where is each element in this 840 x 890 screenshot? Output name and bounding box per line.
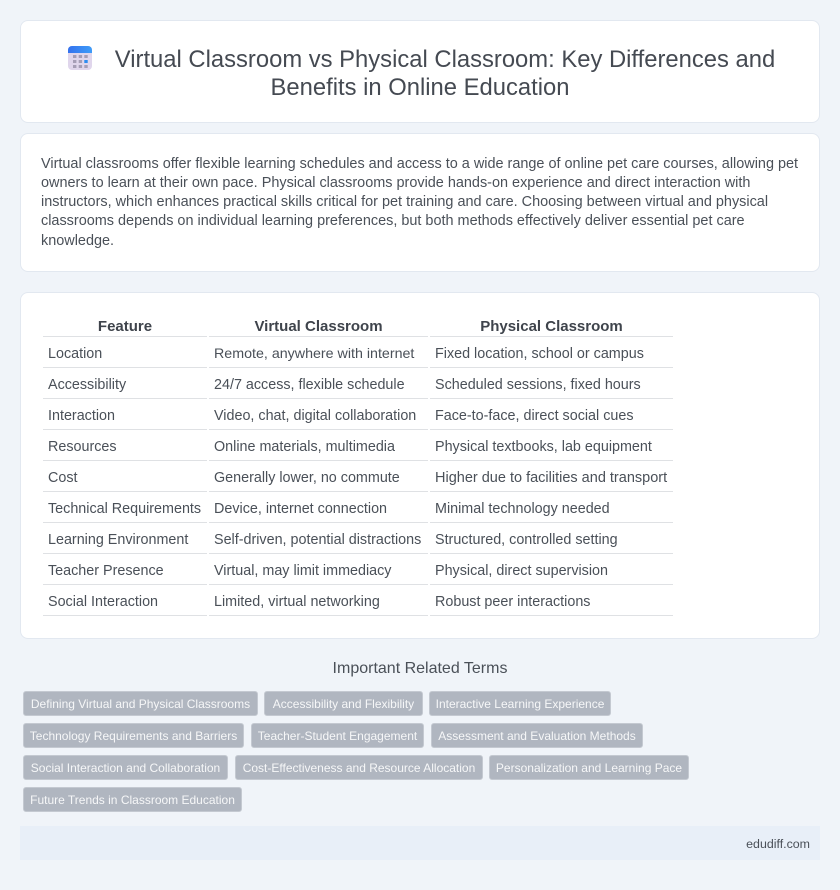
table column: Physical Classroom: Minimal technology needed	[435, 501, 610, 517]
table column: Feature	[48, 346, 201, 610]
text block: introduction: Virtual classrooms offer flexible learning schedules and access to a wide range of online pet care courses, allowing pet	[41, 156, 798, 172]
table column: Virtual Classroom: Remote, anywhere with internet	[214, 346, 414, 362]
table column: Virtual Classroom: Video, chat, digital collaboration	[214, 408, 416, 424]
table column: Virtual Classroom: 24/7 access, flexible schedule	[214, 377, 405, 393]
footer credit: edudiff.com	[746, 837, 810, 851]
footer	[20, 826, 820, 860]
table column: Virtual Classroom	[214, 346, 421, 610]
panel: comparison table	[20, 292, 820, 639]
text block: introduction: knowledge.	[41, 233, 114, 249]
icon: calendar	[68, 46, 92, 70]
table column: Virtual Classroom: Virtual, may limit immediacy	[214, 563, 391, 579]
table column: Feature: Learning Environment	[48, 532, 188, 548]
table column: Physical Classroom: Robust peer interactions	[435, 594, 590, 610]
tag list: related terms: Technology Requirements and Barriers	[30, 729, 237, 743]
table column: Feature: Social Interaction	[48, 594, 158, 610]
table column: Feature: Technical Requirements	[48, 501, 201, 517]
panel: header	[20, 20, 820, 123]
tag list: related terms: Assessment and Evaluation Methods	[438, 729, 636, 743]
table column: Feature: Teacher Presence	[48, 563, 164, 579]
table column: Physical Classroom: Fixed location, school or campus	[435, 346, 644, 362]
tag list: related terms: Future Trends in Classroom Education	[30, 793, 235, 807]
title	[114, 46, 775, 101]
table column: Virtual Classroom: Online materials, multimedia	[214, 439, 395, 455]
title: Benefits in Online Education	[270, 74, 569, 101]
table header: Virtual Classroom: Virtual Classroom	[254, 318, 383, 335]
tag list: related terms: Interactive Learning Experience	[436, 697, 604, 711]
table column: Physical Classroom: Higher due to facilities and transport	[435, 470, 667, 486]
text block: introduction: instructors, which enhances practical skills critical for pet training and care. Choosing between virtual and physical	[41, 194, 768, 210]
table column: Virtual Classroom: Self-driven, potential distractions	[214, 532, 421, 548]
table column: Physical Classroom: Structured, controlled setting	[435, 532, 618, 548]
text block: introduction: owners to learn at their own pace. Physical classrooms provide hands-on experience and direct interaction with	[41, 175, 750, 191]
tag list: related terms: Social Interaction and Collaboration	[31, 761, 220, 775]
table column: Virtual Classroom: Limited, virtual networking	[214, 594, 380, 610]
tag list: related terms: Defining Virtual and Physical Classrooms	[31, 697, 250, 711]
tag list: related terms: Cost-Effectiveness and Resource Allocation	[243, 761, 475, 775]
table header: Physical Classroom: Physical Classroom	[480, 318, 623, 335]
tag list: related terms: Teacher-Student Engagement	[258, 729, 417, 743]
table column: Feature: Accessibility	[48, 377, 126, 393]
tag list: related terms: Personalization and Learning Pace	[496, 761, 682, 775]
tag list: related terms	[23, 691, 689, 812]
table column: Feature: Interaction	[48, 408, 115, 424]
table header: Feature: Feature	[98, 318, 152, 335]
tag list: related terms: Accessibility and Flexibility	[273, 697, 414, 711]
panel: introduction	[20, 133, 820, 272]
table column: Physical Classroom: Scheduled sessions, fixed hours	[435, 377, 641, 393]
table column: Feature: Resources	[48, 439, 117, 455]
table column: Virtual Classroom: Generally lower, no commute	[214, 470, 400, 486]
table column: Physical Classroom: Face-to-face, direct social cues	[435, 408, 634, 424]
table column: Physical Classroom	[435, 346, 668, 610]
title: Virtual Classroom vs Physical Classroom: Key Differences and	[115, 46, 775, 73]
table column: Feature: Cost	[48, 470, 78, 486]
table column: Physical Classroom: Physical, direct supervision	[435, 563, 608, 579]
table column: Physical Classroom: Physical textbooks, lab equipment	[435, 439, 652, 455]
table column: Virtual Classroom: Device, internet connection	[214, 501, 387, 517]
text block: introduction: classrooms depends on individual learning preferences, but both methods effectively deliver essential pet care	[41, 213, 745, 229]
table column: Feature: Location	[48, 346, 102, 362]
text block: introduction	[41, 156, 798, 249]
heading: Important Related Terms: Important Related Terms	[333, 660, 507, 677]
